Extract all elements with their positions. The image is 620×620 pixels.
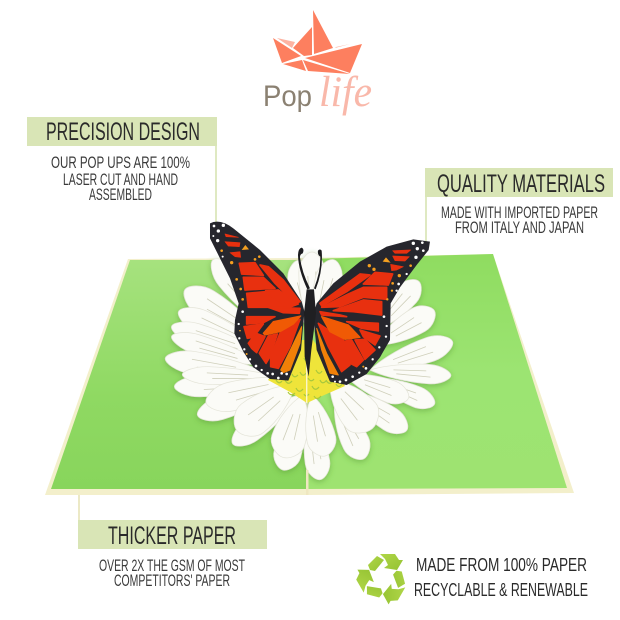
right wing bbox=[313, 239, 430, 385]
icon: recycling symbol bbox=[352, 554, 411, 607]
logo: Poplife bbox=[263, 10, 372, 116]
callout: thicker paper bbox=[78, 495, 267, 590]
flower yellow centre bbox=[268, 340, 345, 403]
icon: origami boat bbox=[273, 10, 362, 74]
callout: quality materials bbox=[425, 168, 613, 242]
left wing bbox=[210, 222, 305, 381]
butterfly body and antennae bbox=[298, 248, 322, 377]
petals behind butterfly bbox=[163, 252, 457, 414]
callout: precision design bbox=[27, 117, 217, 236]
illustration: monarch butterfly bbox=[210, 222, 430, 385]
text: thicker paper description: OVER 2X THE GSM OF MOST bbox=[99, 557, 245, 575]
logo word: Pop: Pop bbox=[263, 80, 312, 113]
logo word: life: life bbox=[319, 69, 372, 116]
illustration: daisy flower bbox=[163, 252, 457, 482]
heading: thicker paper: THICKER PAPER bbox=[108, 522, 236, 550]
pop up card base bbox=[45, 254, 574, 495]
text: precision description bbox=[51, 154, 190, 204]
text: thicker paper description bbox=[99, 557, 245, 590]
text: precision description: LASER CUT AND HAND bbox=[63, 171, 178, 189]
heading: precision design: PRECISION DESIGN bbox=[46, 118, 200, 146]
text: recyclable note bbox=[414, 555, 588, 600]
card centre fold below flower bbox=[306, 470, 308, 495]
text: precision description: OUR POP UPS ARE 100% bbox=[51, 154, 190, 172]
text: thicker paper description: COMPETITORS' PAPER bbox=[114, 572, 230, 590]
petals in front bbox=[194, 366, 414, 482]
text: precision description: ASSEMBLED bbox=[89, 186, 152, 204]
text: quality description bbox=[441, 204, 598, 237]
wing spots bbox=[212, 224, 425, 383]
